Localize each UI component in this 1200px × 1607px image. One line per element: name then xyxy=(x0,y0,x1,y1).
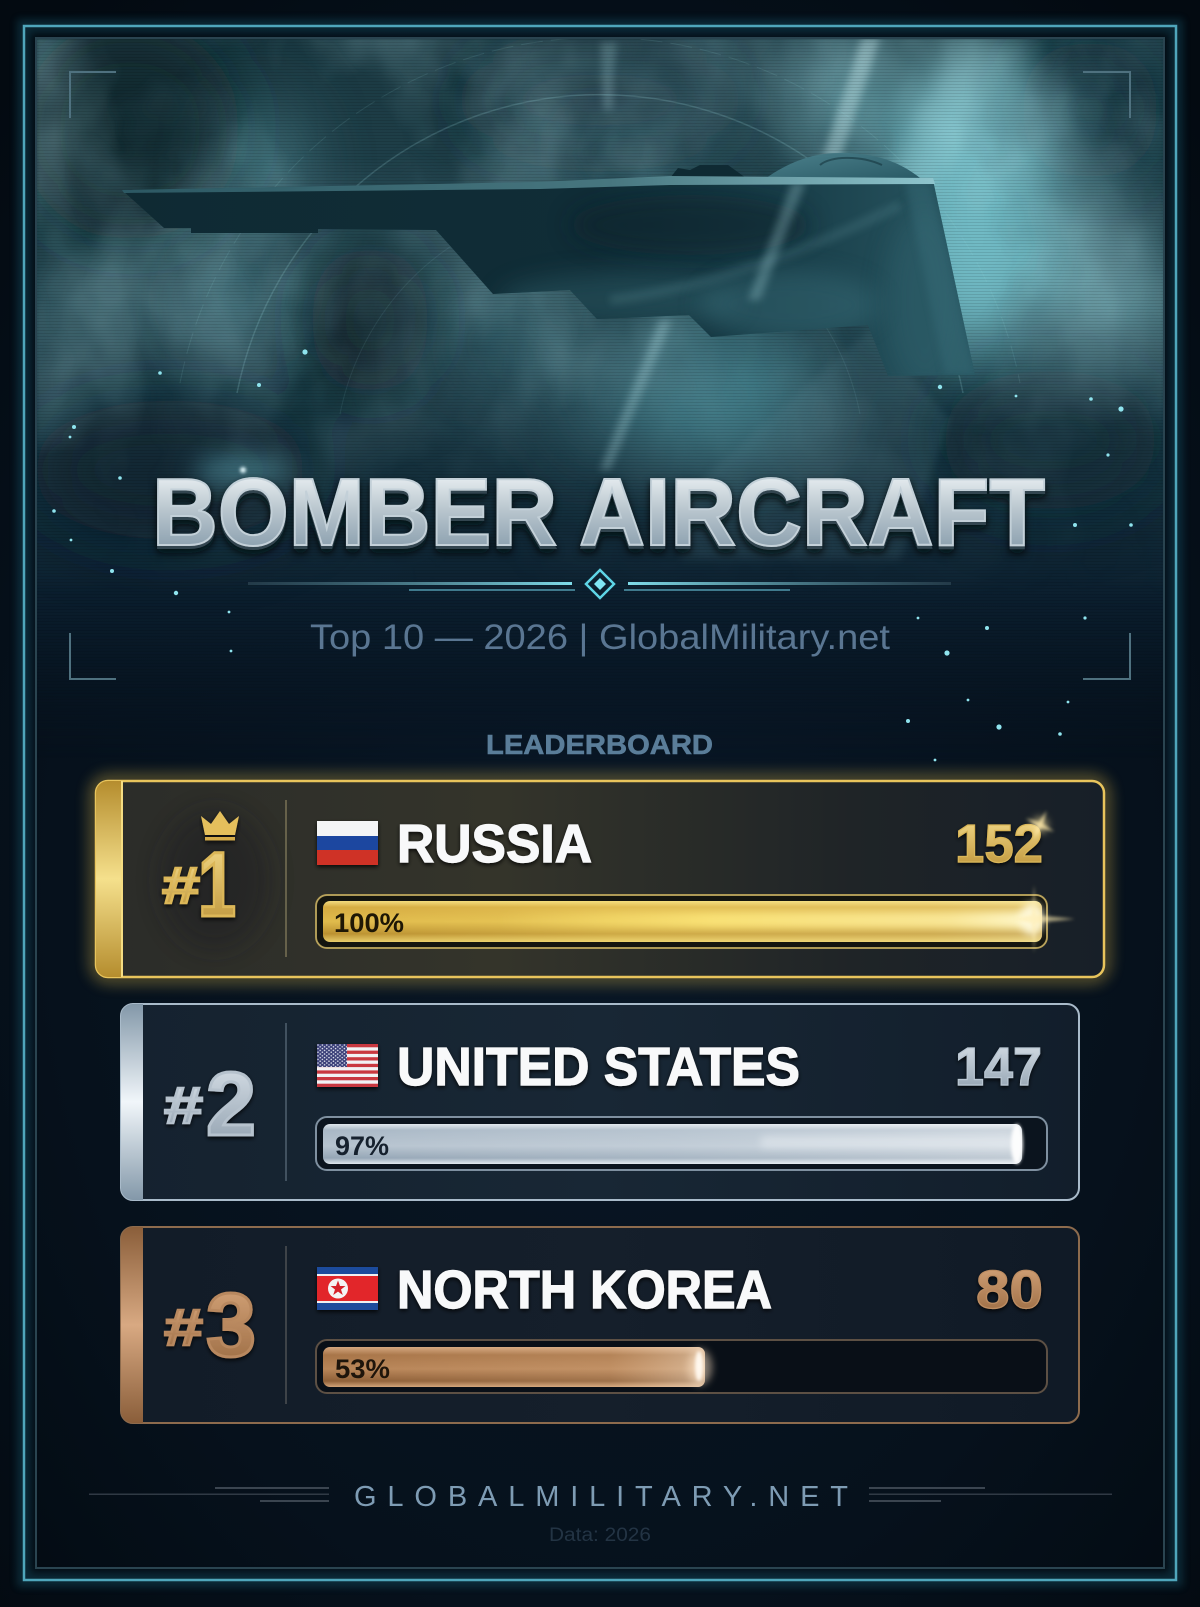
card 2: United States xyxy=(121,1004,1079,1200)
flag: North Korea xyxy=(317,1267,378,1310)
sparkle xyxy=(1019,804,1061,846)
light beams xyxy=(600,38,1035,560)
rank stripe xyxy=(96,781,122,977)
footer brand line: GLOBALMILITARY.NET xyxy=(354,1481,848,1513)
bar flare xyxy=(688,1349,712,1385)
title divider xyxy=(248,570,951,598)
crown icon xyxy=(201,811,239,840)
title: BOMBER AIRCRAFT xyxy=(152,459,1045,566)
bar flare xyxy=(1012,885,1075,953)
hero sky panel xyxy=(37,39,1163,663)
progress bar xyxy=(316,1117,1047,1170)
stealth bomber illustration xyxy=(122,153,975,390)
bar flare xyxy=(1011,1124,1023,1164)
cloud texture xyxy=(37,39,1163,508)
country name: RUSSIA xyxy=(397,814,592,874)
rank number: 3 xyxy=(206,1276,256,1376)
radar arcs xyxy=(180,37,1020,414)
rank number xyxy=(161,834,236,936)
percent label: 53% xyxy=(335,1354,390,1384)
rank number: 2 xyxy=(206,1055,256,1155)
progress bar xyxy=(316,1340,1047,1393)
rank number: 1 xyxy=(198,834,236,936)
value: 147 xyxy=(955,1037,1042,1097)
percent label: 100% xyxy=(334,908,404,938)
rank number xyxy=(163,1276,256,1376)
rank number xyxy=(163,1055,256,1155)
value: 80 xyxy=(976,1260,1043,1320)
divider xyxy=(285,800,287,957)
rank stripe xyxy=(121,1227,143,1423)
leading edge highlight xyxy=(122,176,935,193)
value: 152 xyxy=(955,814,1043,874)
floating particles xyxy=(52,349,1133,761)
rank number: # xyxy=(163,1299,202,1357)
percent label: 97% xyxy=(335,1131,389,1161)
wing shading and highlights xyxy=(506,184,968,373)
country name: UNITED STATES xyxy=(397,1037,800,1097)
bright cloud masses xyxy=(190,40,1155,470)
divider xyxy=(285,1023,287,1181)
flag: Russia xyxy=(317,821,378,865)
engine intake xyxy=(670,165,746,178)
scanlines xyxy=(37,39,1163,493)
country name: NORTH KOREA xyxy=(397,1260,772,1320)
rank number: # xyxy=(163,1077,202,1135)
dark cloud masses xyxy=(37,39,1161,501)
corner brackets xyxy=(70,72,1130,679)
divider xyxy=(285,1246,287,1404)
flag: United States xyxy=(317,1044,378,1087)
wing body xyxy=(122,178,975,376)
card 3: North Korea xyxy=(121,1227,1079,1423)
rank stripe xyxy=(121,1004,143,1200)
leaderboard heading: LEADERBOARD xyxy=(486,729,713,760)
canopy xyxy=(766,153,920,178)
footer data note: Data: 2026 xyxy=(549,1525,651,1546)
card 1: Russia xyxy=(96,781,1104,977)
subtitle: Top 10 — 2026 | GlobalMilitary.net xyxy=(310,618,890,657)
progress bar xyxy=(316,885,1075,953)
rank number: # xyxy=(161,857,199,915)
